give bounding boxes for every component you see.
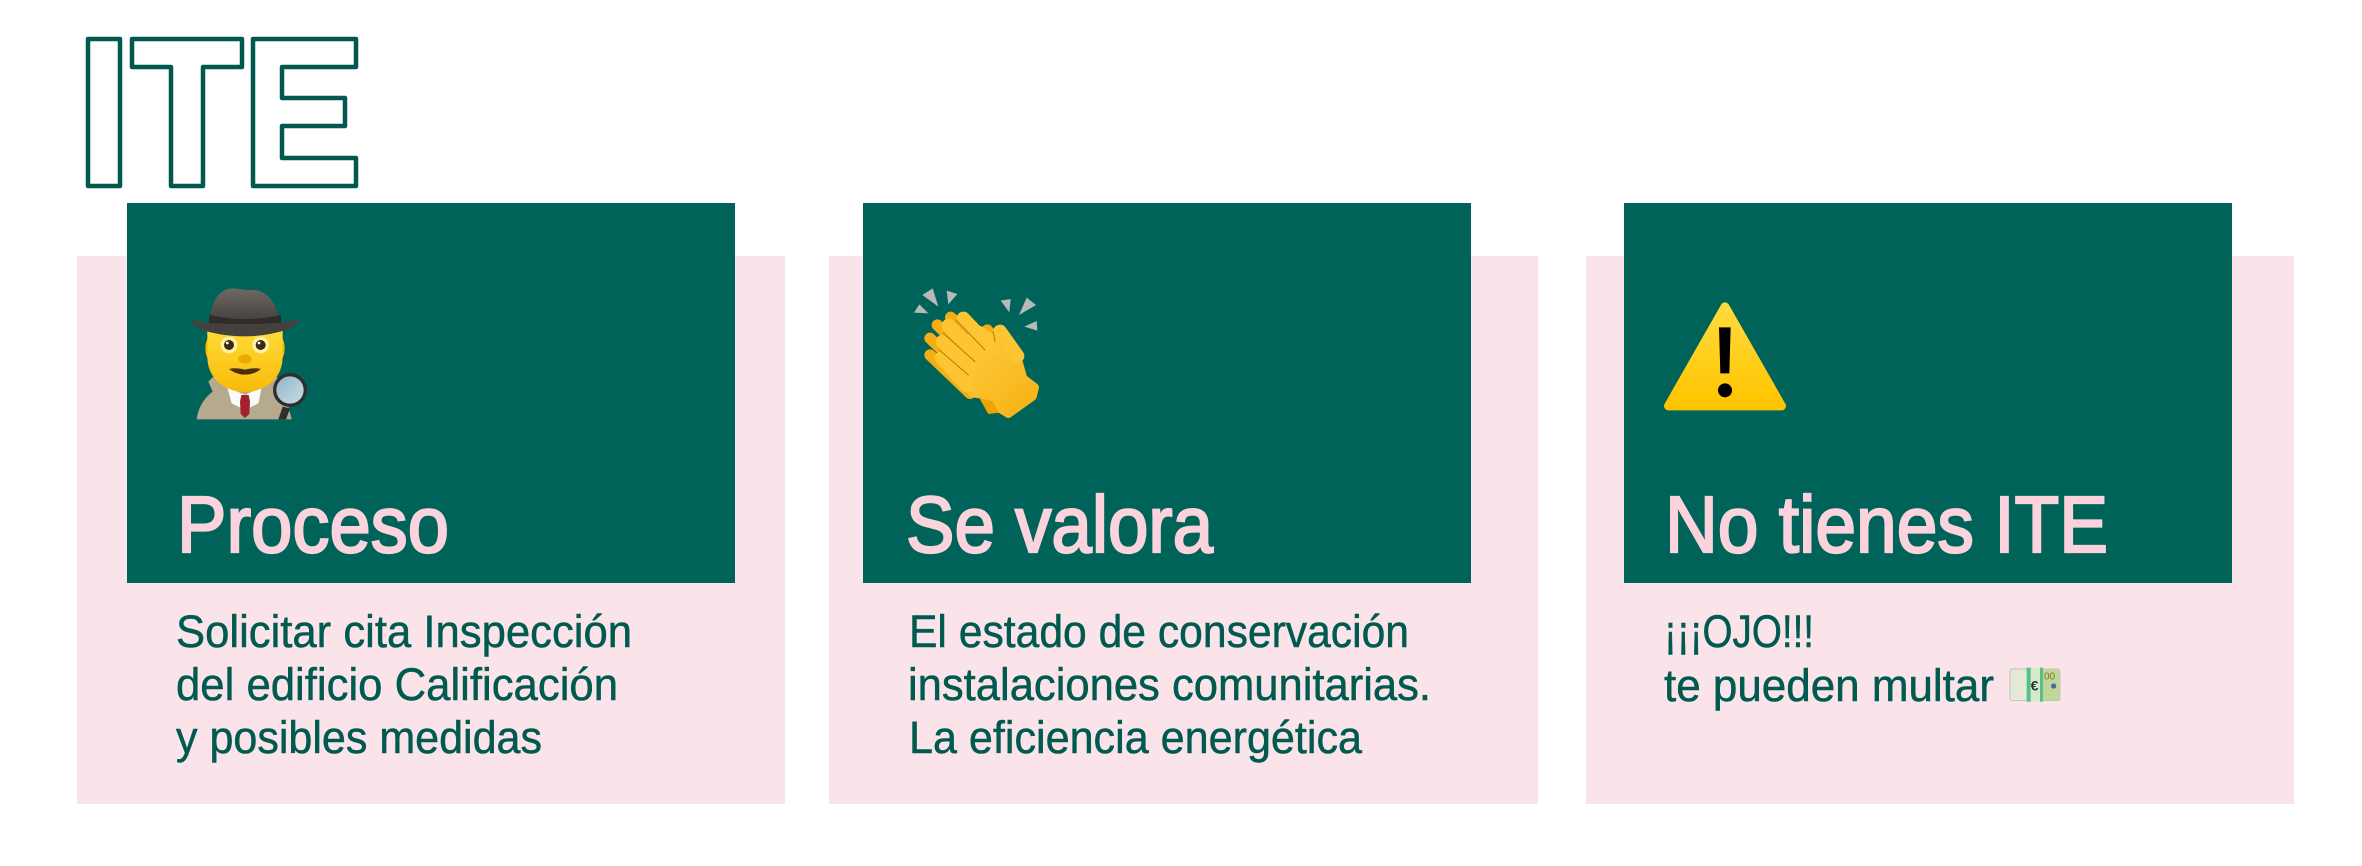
icon: detective xyxy=(192,288,305,419)
panel background: proceso xyxy=(77,256,785,804)
icon: euro banknote: 00 xyxy=(2044,671,2056,682)
panel background: se valora xyxy=(829,256,1538,804)
title: ITE outlined xyxy=(88,39,356,187)
header block: proceso xyxy=(127,203,735,583)
header block: no tienes ITE xyxy=(1624,203,2232,583)
text block: proceso: y posibles medidas xyxy=(176,712,542,763)
panel: se valora xyxy=(829,203,1538,804)
text block: proceso xyxy=(176,606,632,763)
header block: se valora xyxy=(863,203,1471,583)
heading: No tienes ITE: No tienes ITE xyxy=(1665,480,2108,569)
icon: clapping hands xyxy=(914,288,1037,414)
icon: warning xyxy=(1668,307,1782,406)
heading: Proceso: Proceso xyxy=(177,480,449,569)
text block: se valora xyxy=(908,606,1431,763)
panel: no tienes ITE xyxy=(1586,203,2294,804)
heading: Se valora: Se valora xyxy=(906,480,1213,569)
text block: proceso: Solicitar cita Inspección xyxy=(176,606,632,657)
text block: se valora: La eficiencia energética xyxy=(909,712,1363,763)
panel background: no tienes ITE xyxy=(1586,256,2294,804)
text block: no tienes ITE: te pueden multar xyxy=(1664,660,1994,711)
text block: no tienes ITE: ¡¡¡OJO!!! xyxy=(1664,606,1814,657)
text block: proceso: del edificio Calificación xyxy=(176,659,618,710)
icon: euro banknote: € xyxy=(2031,678,2039,694)
panel: proceso xyxy=(77,203,785,804)
icon: euro banknote xyxy=(2010,668,2060,702)
text block: se valora: instalaciones comunitarias. xyxy=(908,659,1431,710)
text block: no tienes ITE xyxy=(1664,606,1994,711)
text block: se valora: El estado de conservación xyxy=(909,606,1409,657)
